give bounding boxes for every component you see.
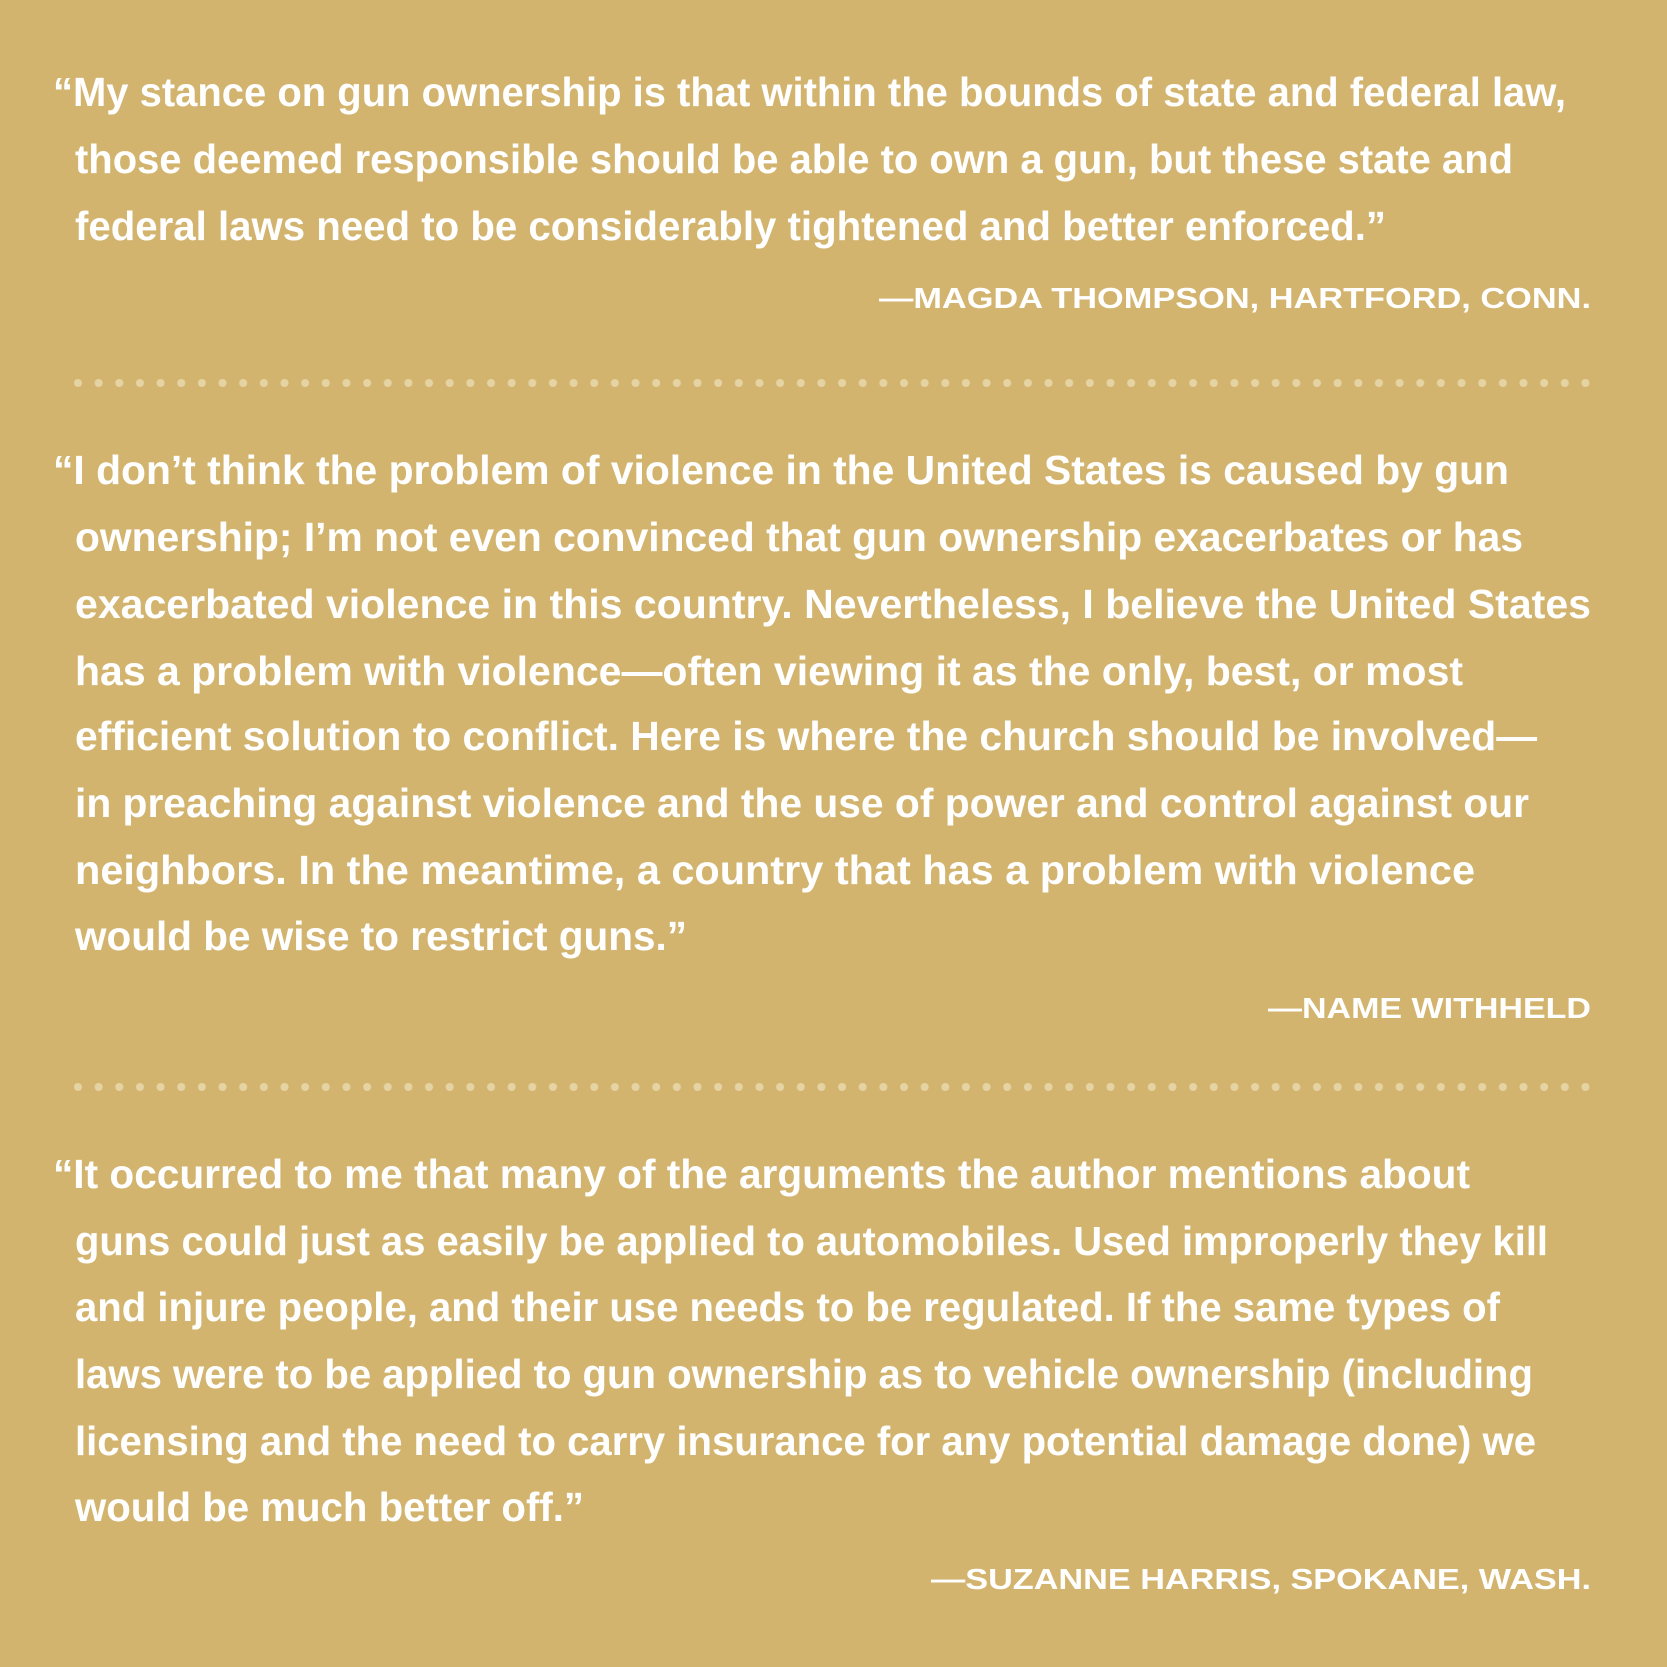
quote 3: guns could just as easily be applied to automobiles. Used improperly they kill [75,1218,1548,1264]
quote 3: licensing and the need to carry insurance for any potential damage done) we [75,1418,1536,1464]
quote 2: would be wise to restrict guns.” [74,913,687,959]
quote 3: “It occurred to me that many of the arguments the author mentions about [53,1151,1470,1197]
quote 3: would be much better off.” [74,1484,584,1530]
quote 1: those deemed responsible should be able to own a gun, but these state and [75,136,1513,182]
quote 2: ownership; I’m not even convinced that gun ownership exacerbates or has [75,514,1523,560]
quote 2: exacerbated violence in this country. Nevertheless, I believe the United States [75,581,1591,627]
quote 2: in preaching against violence and the use of power and control against our [75,780,1529,826]
quote 2: neighbors. In the meantime, a country that has a problem with violence [75,847,1475,893]
quote 3: laws were to be applied to gun ownership as to vehicle ownership (including [75,1351,1533,1397]
quote 2: “I don’t think the problem of violence in the United States is caused by gun [53,447,1509,493]
attribution 2: —NAME WITHHELD [1268,993,1591,1025]
attribution 1: —MAGDA THOMPSON, HARTFORD, CONN. [879,283,1591,315]
attribution 3: —SUZANNE HARRIS, SPOKANE, WASH. [931,1564,1591,1596]
quote 3 [53,1151,1548,1530]
quote 3: and injure people, and their use needs to be regulated. If the same types of [75,1284,1500,1330]
quote 1 [53,69,1566,249]
quote 1: “My stance on gun ownership is that within the bounds of state and federal law, [53,69,1566,115]
quote 2: efficient solution to conflict. Here is where the church should be involved— [75,713,1537,759]
quote 1: federal laws need to be considerably tightened and better enforced.” [75,203,1386,249]
quote 2: has a problem with violence—often viewing it as the only, best, or most [75,648,1463,694]
quote 2 [53,447,1591,959]
